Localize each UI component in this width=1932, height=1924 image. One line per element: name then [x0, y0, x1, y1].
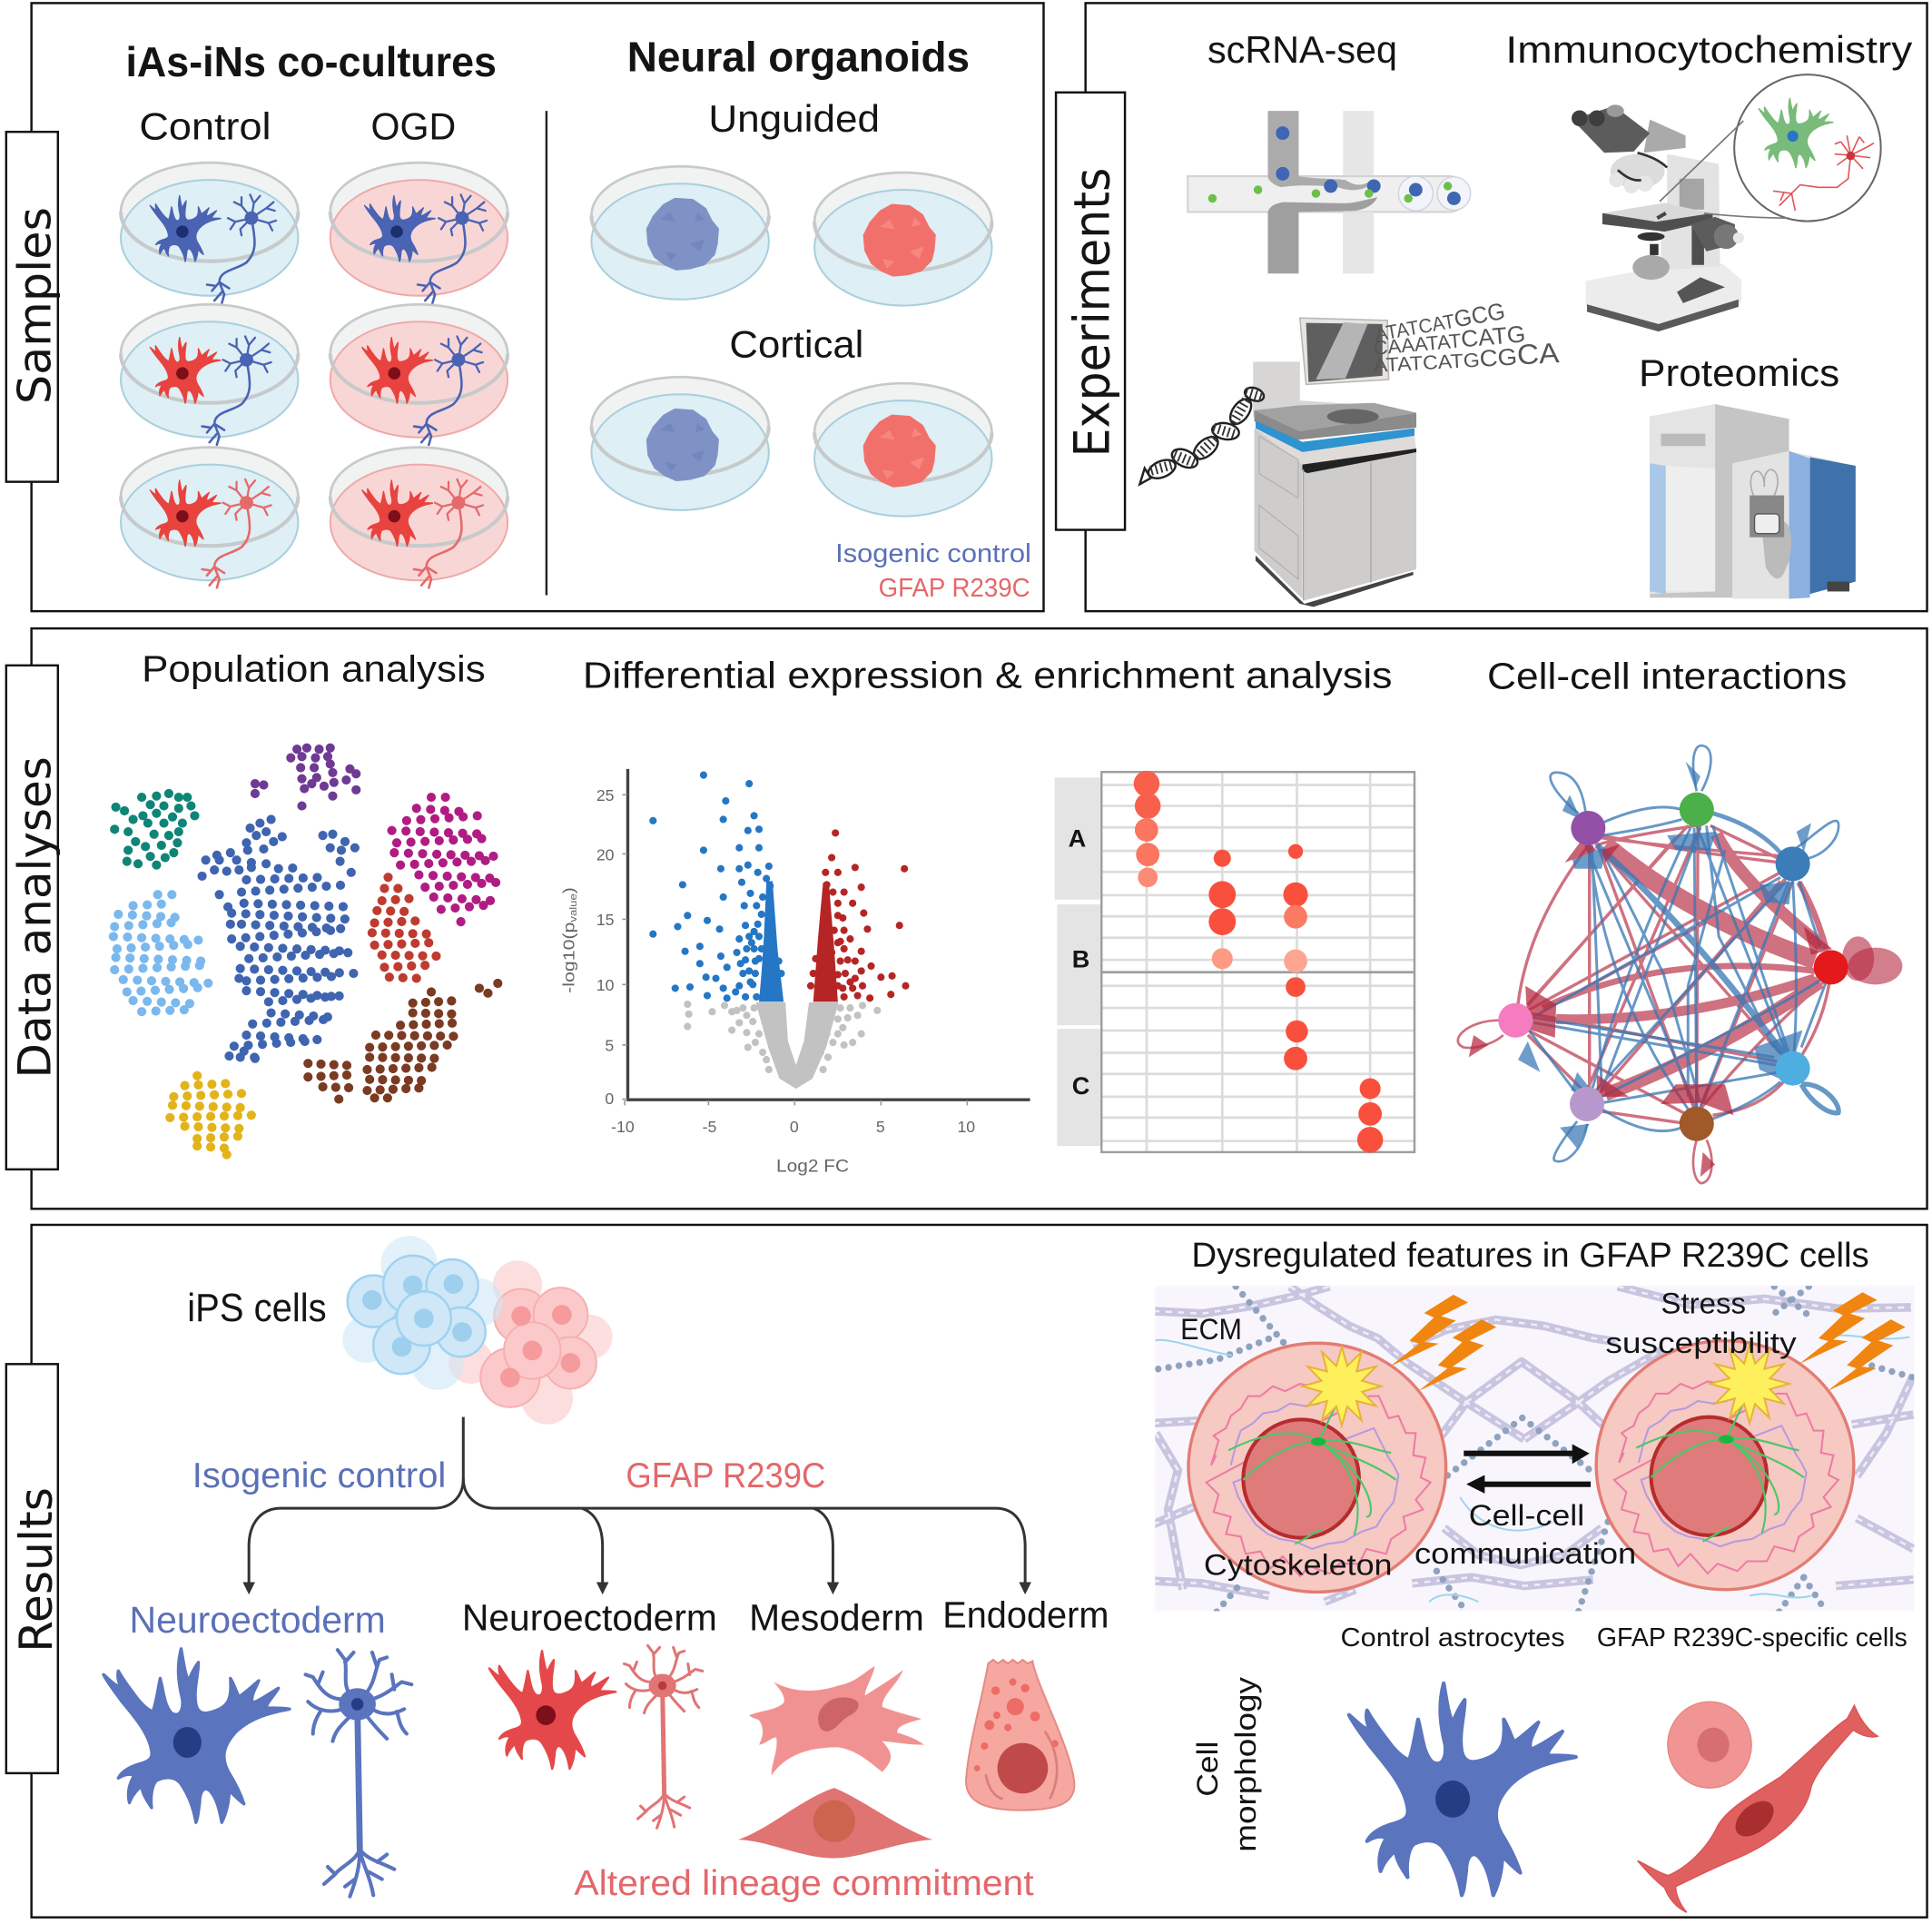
dish: OGD, isogenic astrocyte and neuron [330, 163, 508, 303]
chart: volcano plot: 5 [876, 1118, 885, 1136]
heading: Dysregulated features: Dysregulated features in GFAP R239C cells [1191, 1237, 1869, 1275]
label: Samples: Samples [8, 207, 62, 404]
text: Isogenic control branch: Isogenic control [192, 1455, 446, 1495]
icon: DNA sequencer with read output [1139, 299, 1560, 607]
label: Results: Results [9, 1487, 63, 1653]
heading: Neural organoids: Neural organoids [627, 34, 970, 81]
heading: OGD: OGD [371, 104, 456, 147]
chart: enrichment dot plot: C [1072, 1071, 1089, 1100]
text: Endoderm: Endoderm [942, 1594, 1109, 1636]
icon: mesoderm spindle cell [738, 1788, 932, 1859]
chart: volcano plot: value [568, 893, 579, 923]
icon: mutant neuron [624, 1645, 703, 1828]
legend: isogenic control: Isogenic control [835, 539, 1031, 568]
heading: Immunocytochemistry: Immunocytochemistry [1505, 28, 1912, 71]
text: Cell-cell communication: communication [1414, 1537, 1636, 1570]
text: Cell morphology: Cell [1191, 1741, 1224, 1797]
text: Mesoderm: Mesoderm [749, 1596, 924, 1638]
text: ECM: ECM [1180, 1313, 1242, 1346]
chart: volcano plot: 0 [790, 1118, 799, 1136]
icon: DNA sequencer with read output: CAAATATCATG [1372, 321, 1526, 360]
dish: control, mutant astrocyte with isogenic neuron [121, 296, 298, 445]
panel: data analyses [6, 628, 1927, 1209]
dish: control, isogenic astrocyte and neuron [121, 154, 298, 303]
chart: volcano plot: -log10(p [559, 934, 577, 993]
chart: volcano plot: Log2 FC [776, 1158, 849, 1177]
chart: volcano plot: 10 [596, 976, 615, 994]
icon: mutant astrocyte [489, 1651, 616, 1769]
chart: volcano plot: 10 [958, 1118, 975, 1136]
illustration: extracellular matrix with two cells [1153, 1286, 1914, 1612]
chart: volcano plot: 0 [605, 1090, 614, 1108]
chart: volcano plot: 15 [596, 911, 615, 929]
label: Experiments [1056, 93, 1125, 530]
icon: isogenic neuron [306, 1650, 411, 1897]
heading: Cell-cell interactions: Cell-cell interactions [1487, 656, 1847, 697]
icon: mesoderm mesenchymal cell [749, 1666, 924, 1776]
label: Results [6, 1364, 63, 1773]
text: Cell-cell communication [1414, 1499, 1636, 1570]
chart: cell population scatter [113, 748, 499, 1155]
text: Altered lineage commitment: Altered lineage commitment [574, 1863, 1034, 1903]
heading: Population analysis: Population analysis [142, 647, 486, 689]
dish: unguided organoid mutant [814, 163, 991, 306]
heading: Control: Control [139, 104, 271, 147]
chart: volcano plot: 5 [605, 1037, 614, 1055]
text: Stress susceptibility: susceptibility [1605, 1327, 1797, 1359]
heading: Unguided: Unguided [708, 97, 880, 140]
text: GFAP R239C branch: GFAP R239C [626, 1455, 825, 1495]
label: Experiments: Experiments [1063, 168, 1120, 457]
chart: volcano plot: -5 [703, 1118, 716, 1136]
icon: DNA sequencer with read output: ATATCATGCG [1373, 299, 1507, 347]
panel: results [6, 1225, 1927, 1918]
icon: endoderm epithelial cell [966, 1660, 1074, 1811]
text: Neuroectoderm isogenic: Neuroectoderm [130, 1599, 386, 1641]
panel: samples [6, 3, 1043, 611]
icon: DNA sequencer with read output: ATATCATG CGCA [1373, 337, 1560, 379]
icon: control astrocyte morphology [1349, 1683, 1576, 1895]
text: Control astrocytes: Control astrocytes [1341, 1623, 1565, 1653]
arrows: differentiation lineage tree [242, 1417, 1031, 1594]
label: Data analyses [6, 666, 62, 1169]
dish: control, mutant astrocyte and neuron [121, 439, 298, 587]
icon: iPS cell colony, mutant [448, 1260, 613, 1425]
dish: OGD, mutant astrocyte and neuron [330, 448, 508, 587]
text: Cell-cell communication: Cell-cell [1469, 1499, 1584, 1532]
icon: iPS cell colony, isogenic [342, 1236, 503, 1390]
icon: elongated mutant cell [1638, 1705, 1878, 1912]
heading: scRNA-seq: scRNA-seq [1208, 28, 1397, 71]
text: Stress susceptibility [1605, 1288, 1797, 1359]
chart: enrichment dot plot [1055, 771, 1414, 1153]
dish: cortical organoid isogenic [591, 369, 769, 510]
panel: experiments [1056, 3, 1927, 611]
chart: cell-cell interaction network [1458, 745, 1902, 1183]
text: Neuroectoderm mutant: Neuroectoderm [462, 1596, 717, 1638]
dish: unguided organoid isogenic [591, 158, 769, 300]
chart: volcano plot: 25 [596, 786, 615, 804]
chart: enrichment dot plot: A [1069, 824, 1086, 852]
chart: volcano plot: 20 [596, 845, 615, 863]
text: Cell morphology: morphology [1229, 1676, 1262, 1852]
text: Stress susceptibility: Stress [1661, 1288, 1746, 1320]
icon: microscope with magnified cells [1572, 74, 1881, 331]
chart: volcano plot: -10 [611, 1118, 635, 1136]
chart: volcano plot [559, 769, 1030, 1177]
text: Cell morphology [1191, 1676, 1262, 1852]
text: GFAP R239C-specific cells: GFAP R239C-specific cells [1597, 1623, 1907, 1653]
heading: Proteomics: Proteomics [1639, 351, 1839, 394]
icon: isogenic astrocyte [104, 1649, 290, 1822]
dish: OGD, mutant astrocyte with isogenic neuron [330, 304, 508, 445]
legend: GFAP R239C: GFAP R239C [879, 574, 1030, 603]
heading: Cortical: Cortical [729, 323, 863, 366]
chart: volcano plot: ) [559, 887, 577, 893]
chart: enrichment dot plot: B [1072, 944, 1089, 972]
dish: cortical organoid mutant [814, 375, 991, 517]
heading: iAs-iNs co-cultures: iAs-iNs co-cultures [125, 38, 497, 85]
icon: mass spectrometer [1650, 404, 1856, 599]
text: iPS cells: iPS cells [187, 1287, 327, 1330]
label: Data analyses: Data analyses [8, 756, 62, 1078]
text: Cytoskeleton: Cytoskeleton [1204, 1548, 1393, 1581]
heading: Differential expression and enrichment analysis: Differential expression & enrichment analysis [583, 654, 1393, 696]
icon: round mutant cell [1668, 1702, 1751, 1788]
icon: microfluidic droplet chip [1188, 111, 1471, 273]
label: Samples [6, 132, 62, 482]
